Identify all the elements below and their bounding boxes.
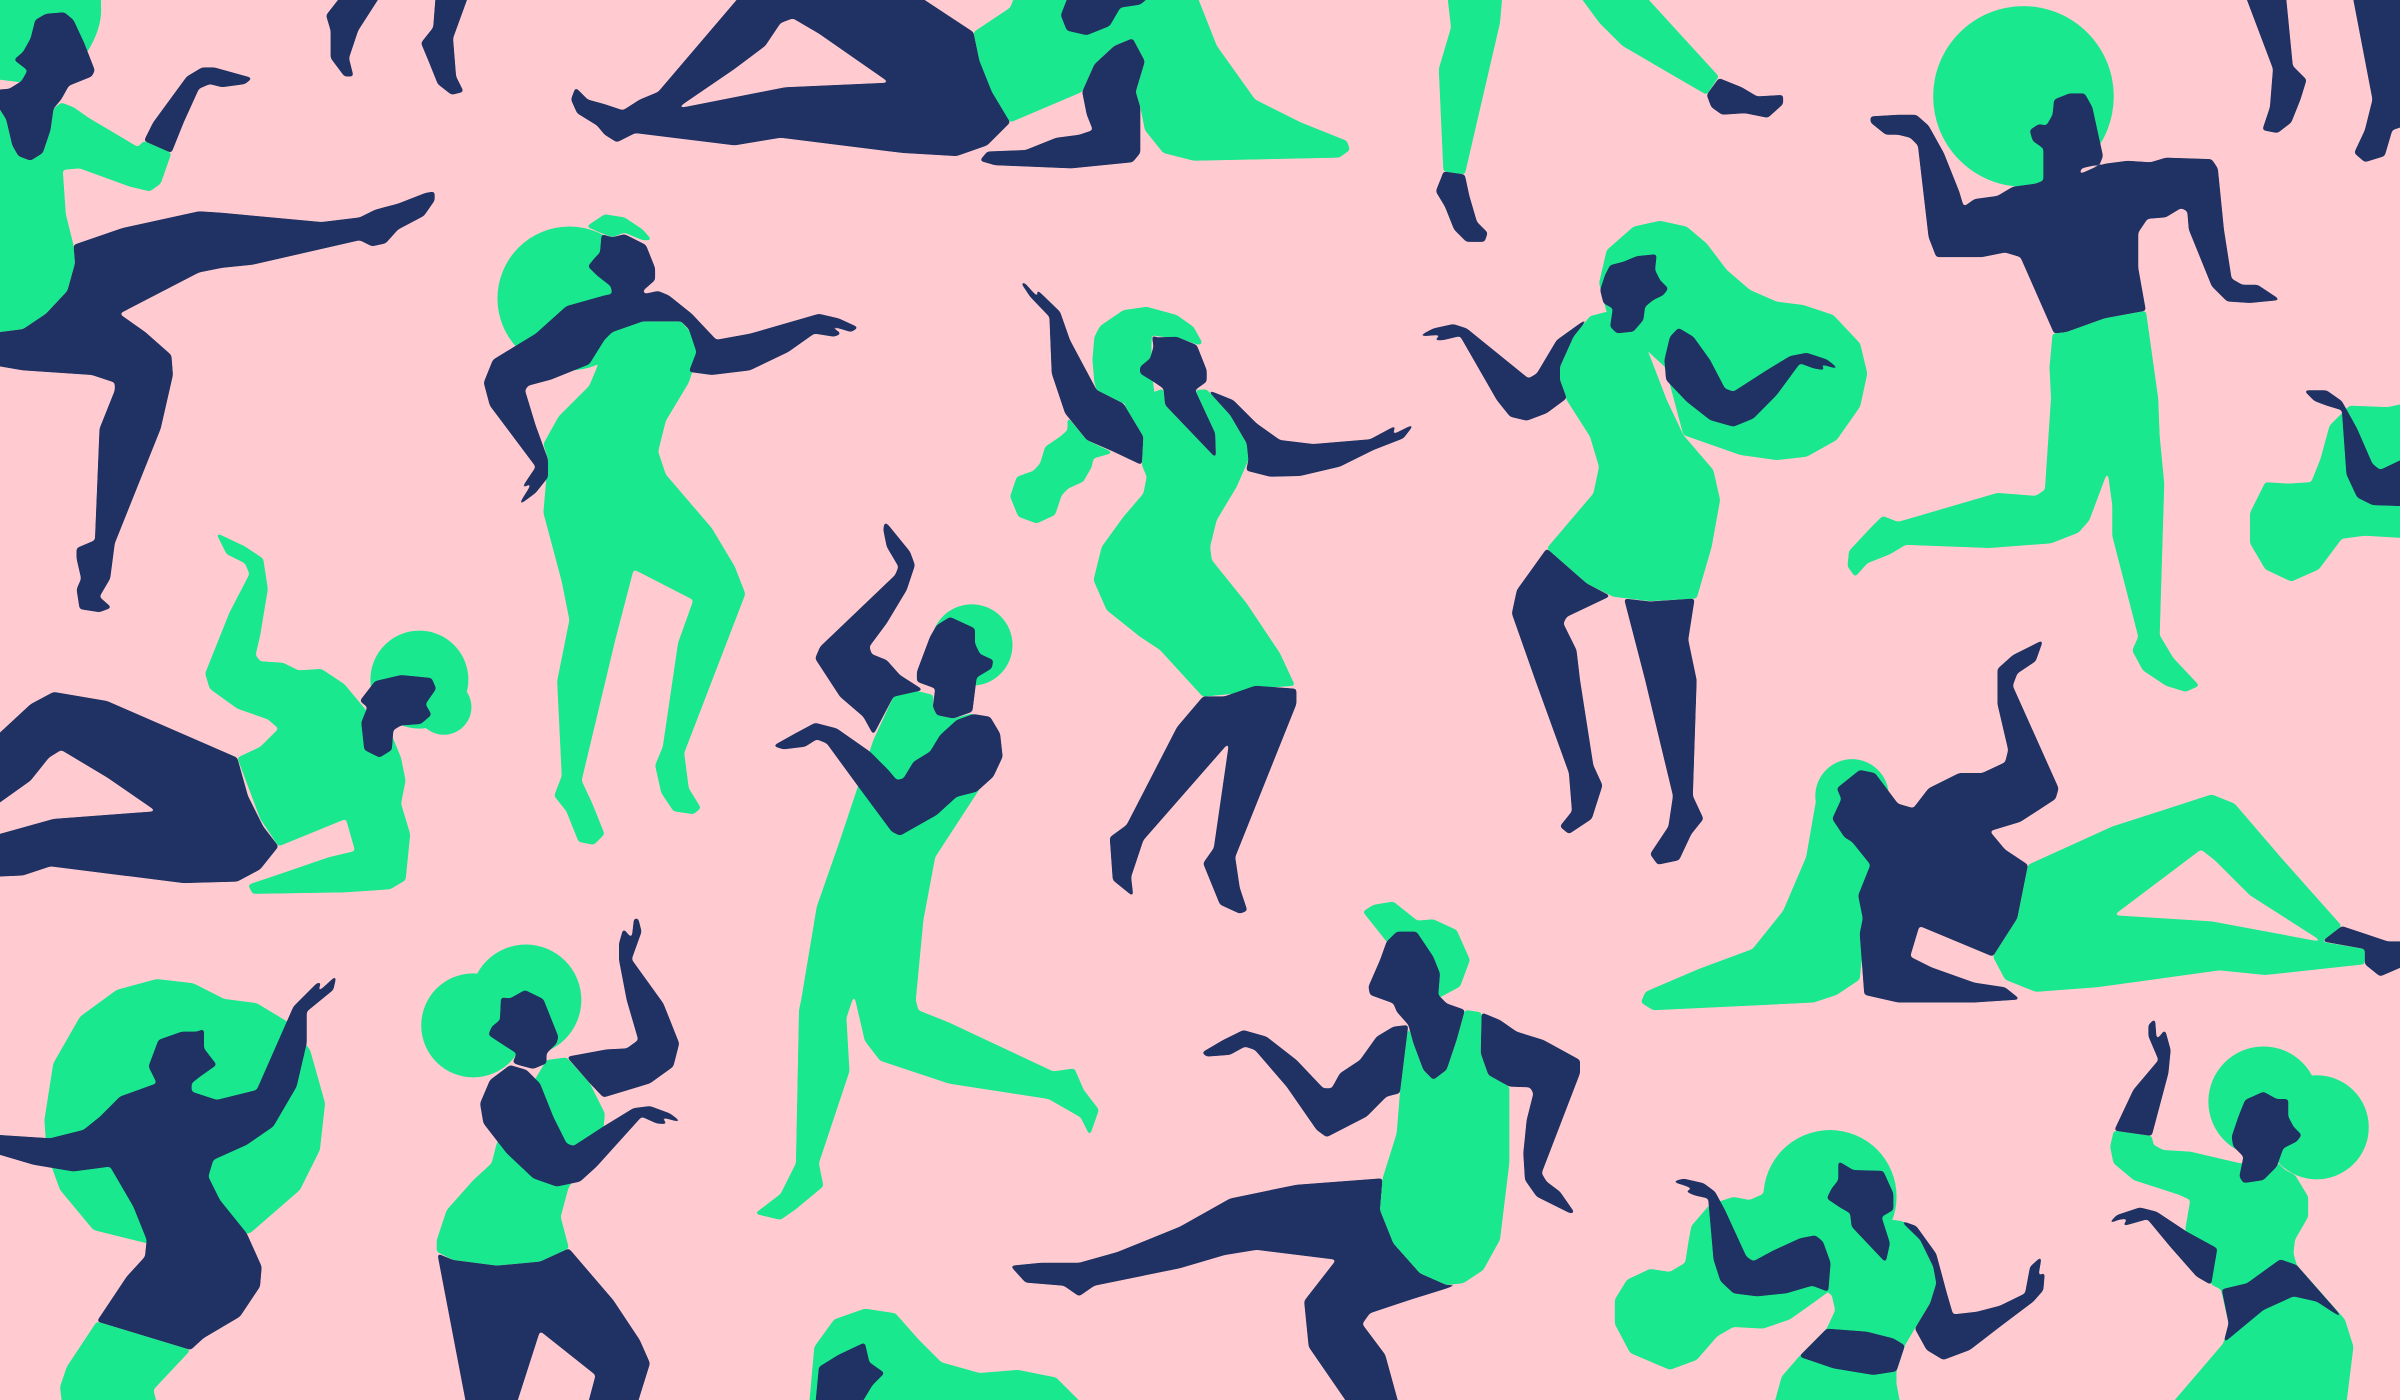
figure: right-centre woman with long hair — [1417, 221, 1867, 865]
hair — [1092, 307, 1203, 404]
head — [0, 12, 95, 161]
foot — [1436, 171, 1488, 242]
hair blobs — [1615, 1179, 1852, 1370]
hair — [808, 1309, 1094, 1400]
leg one — [1512, 548, 1611, 834]
raised arm — [815, 522, 923, 735]
hair bun two — [421, 973, 525, 1077]
figure: centre dancer — [1010, 282, 1415, 914]
left arm — [1202, 1025, 1408, 1137]
hair circle — [1763, 1130, 1897, 1263]
torso and hair — [973, 0, 1350, 161]
head and chest — [1368, 932, 1465, 1080]
gap between legs — [677, 18, 889, 109]
torso — [0, 90, 171, 334]
hips — [2222, 1259, 2345, 1343]
figure: top-centre reclining dancer — [571, 0, 1350, 168]
second leg — [1573, 0, 1719, 95]
arms and torso — [0, 975, 337, 1350]
hair top — [586, 214, 652, 240]
head — [2232, 1092, 2302, 1183]
belt — [1799, 1329, 1905, 1375]
hair chain — [1010, 417, 1113, 523]
head — [1600, 254, 1668, 333]
left arm — [1671, 1179, 1831, 1296]
body — [1771, 1220, 1936, 1400]
body — [437, 1057, 605, 1266]
hair — [1599, 221, 1867, 460]
head — [1061, 0, 1160, 35]
body and legs — [543, 321, 745, 845]
figure: top-left dancer kicking — [0, 0, 435, 612]
arm — [2304, 390, 2400, 507]
head and arms — [484, 234, 859, 507]
head — [360, 675, 436, 758]
hair bump — [416, 680, 471, 735]
legs — [571, 0, 1010, 156]
hair — [0, 0, 101, 83]
bent arm — [480, 1065, 683, 1187]
head — [917, 617, 993, 718]
head — [1827, 1161, 1893, 1263]
legs — [1110, 686, 1296, 914]
right arm — [1207, 389, 1415, 477]
hair bun one — [2208, 1046, 2319, 1157]
leg — [1010, 1178, 1463, 1400]
raised arm — [2114, 1018, 2171, 1136]
legs — [437, 1248, 650, 1400]
figure: lower-right dancer with hair blobs — [1615, 1130, 2045, 1400]
lower arm — [2107, 1207, 2217, 1285]
dress — [1093, 388, 1295, 697]
skirt — [60, 1322, 191, 1400]
dress — [1547, 312, 1720, 601]
legs — [1993, 794, 2365, 992]
foot left — [326, 0, 386, 77]
right arm — [1899, 1220, 2045, 1360]
figure: top-right dancer — [1847, 6, 2281, 692]
figure: left-centre dancer — [484, 214, 859, 845]
second foot — [1707, 78, 1783, 118]
body — [2110, 1131, 2353, 1400]
flowing hair — [1641, 781, 1898, 1010]
left arm — [1020, 282, 1143, 465]
hair — [2250, 401, 2400, 582]
body and legs — [755, 690, 1099, 1220]
head — [1140, 335, 1216, 458]
legs — [0, 692, 279, 883]
hair — [497, 227, 641, 370]
figure: left reclining dancer — [0, 533, 471, 894]
hair — [1363, 902, 1470, 998]
foot two — [2351, 0, 2400, 162]
right arm — [1481, 1012, 1580, 1213]
hair — [44, 979, 325, 1243]
legs — [1847, 311, 2199, 692]
forearm — [144, 67, 253, 153]
vest — [1380, 1010, 1509, 1285]
leg — [1439, 0, 1503, 174]
arm — [980, 38, 1145, 168]
figure: lower-right reclining dancer — [1641, 640, 2400, 1010]
head — [814, 1342, 885, 1400]
figure: bottom-right dancer — [2107, 1018, 2369, 1400]
figure: centre-lower dancer — [755, 522, 1099, 1220]
right arm — [1664, 328, 1841, 427]
hair — [931, 604, 1013, 686]
figure: feet at top edge — [326, 0, 471, 95]
raised arm — [567, 918, 679, 1097]
upper body and raised leg — [1832, 640, 2059, 1003]
head — [488, 990, 558, 1069]
figure: bottom-left dancer — [0, 975, 337, 1400]
hair circle — [1815, 759, 1889, 833]
foot right — [421, 0, 471, 95]
figure: top-centre legs — [1436, 0, 1783, 242]
hair bun two — [2265, 1075, 2369, 1179]
leg two — [1624, 598, 1704, 865]
hair — [370, 631, 468, 729]
figure: right-edge dancer — [2250, 390, 2400, 582]
body — [205, 533, 410, 894]
hair — [1933, 6, 2114, 187]
figure: bottom-centre head cropped — [808, 1309, 1094, 1400]
foot one — [2242, 0, 2307, 133]
hair bun one — [471, 945, 581, 1055]
left arm — [1417, 316, 1590, 421]
foot — [2322, 926, 2400, 977]
upper body and arms — [1870, 93, 2281, 334]
bent arm — [773, 714, 1003, 836]
figure: lower-centre-right dancer — [1010, 902, 1580, 1400]
legs — [0, 191, 435, 612]
figure: feet at top-right edge — [2242, 0, 2400, 162]
figure: bottom dancer with two hair buns — [421, 918, 683, 1400]
